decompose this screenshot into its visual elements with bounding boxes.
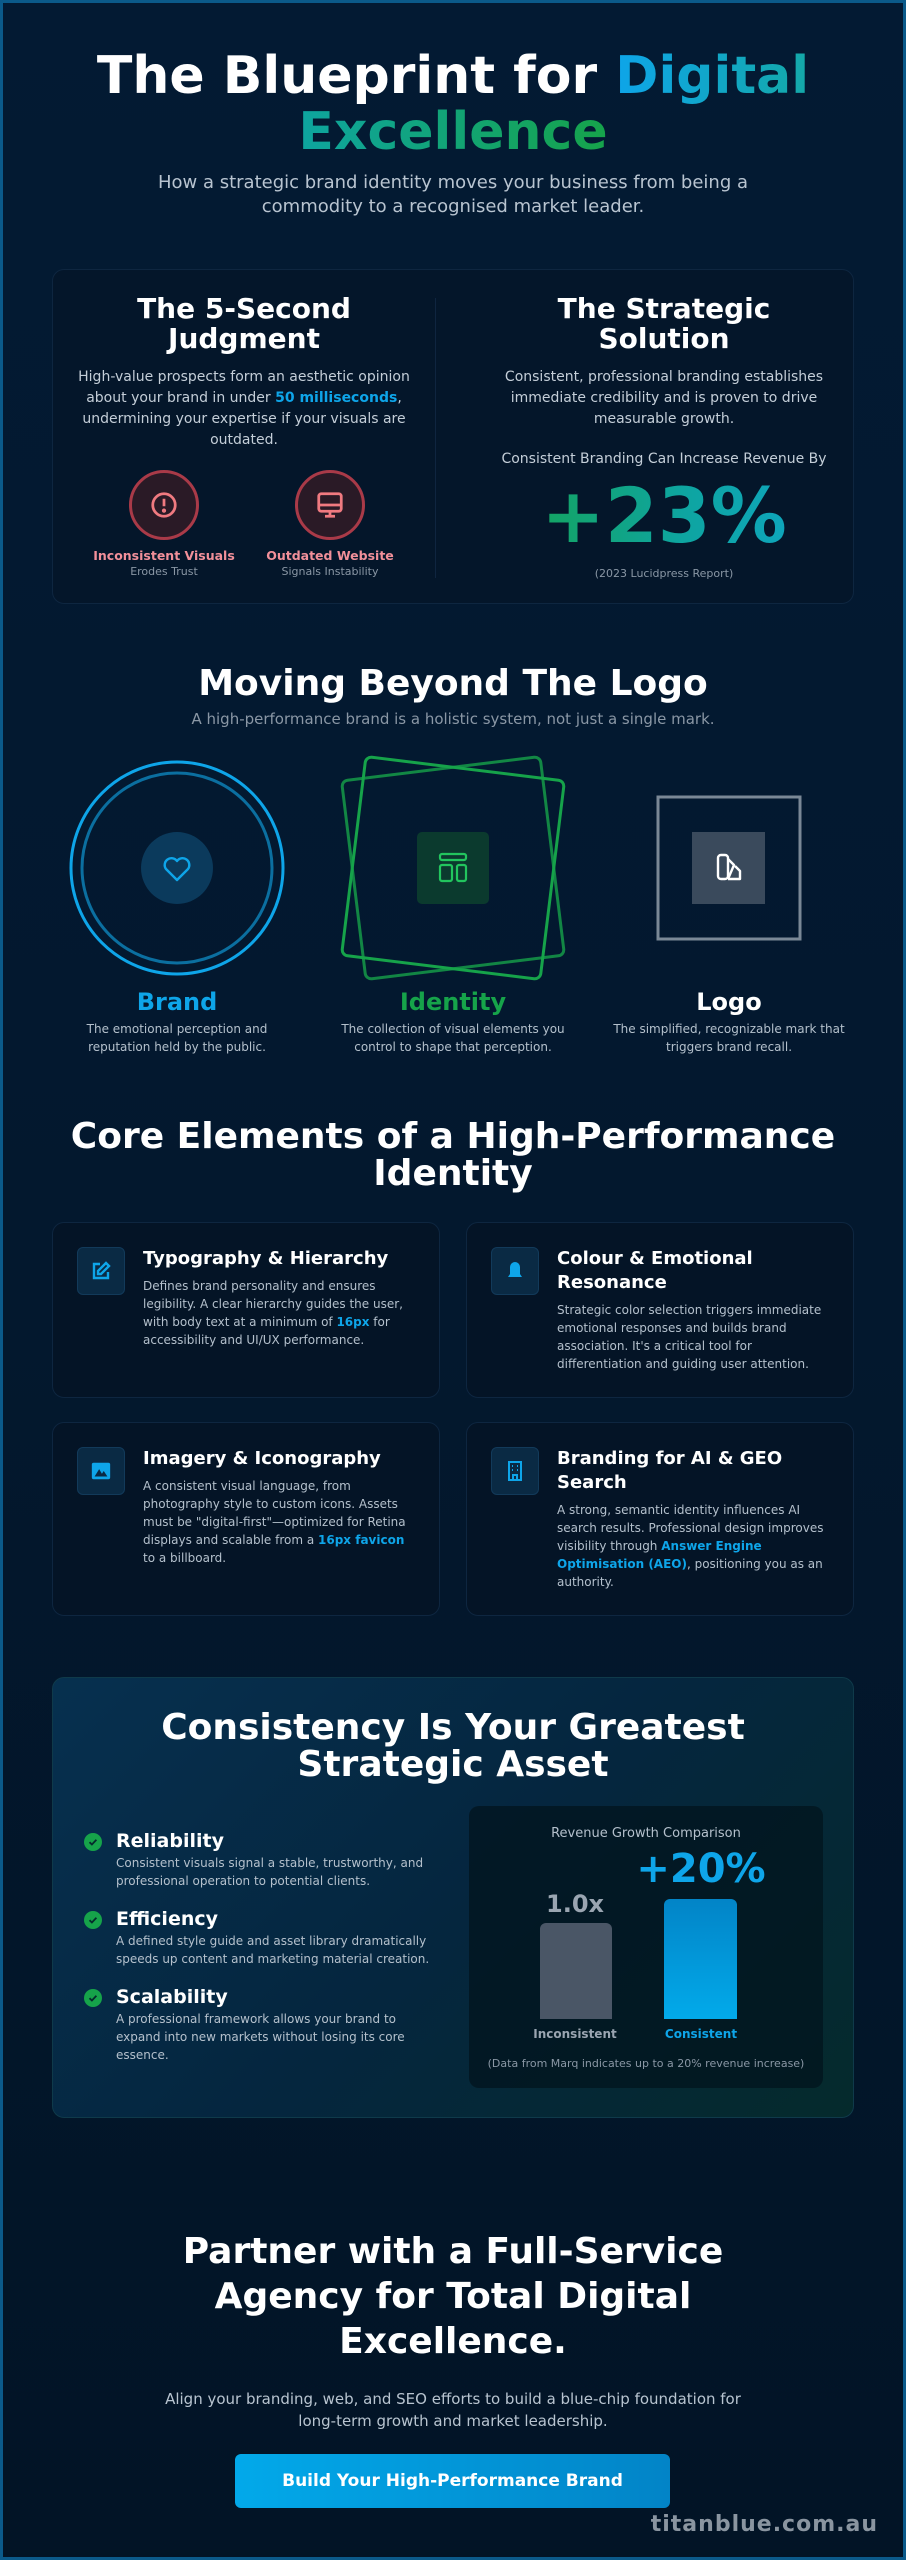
card: colour: Colour & Emotional <box>557 1248 753 1269</box>
heading: strategic solution: The Strategic <box>558 292 770 325</box>
item: scalability: Scalability <box>116 1986 228 2008</box>
icon: pencil <box>77 1247 125 1295</box>
list: benefits <box>84 1830 429 2062</box>
panel: judgment and solution <box>52 269 854 604</box>
heading: 5-second judgment <box>137 292 351 355</box>
footer: website: titanblue.com.au <box>651 2512 878 2537</box>
heading: partner CTA: Agency for Total Digital <box>215 2276 691 2317</box>
label: identity: control to shape that perception. <box>354 1040 552 1054</box>
heading: core elements <box>71 1116 835 1194</box>
heading: partner CTA <box>183 2231 723 2362</box>
item: reliability: Consistent visuals signal a stable, trustworthy, and professional operation to potential clients. <box>116 1856 423 1888</box>
label: brand <box>86 988 267 1054</box>
icon: outdated website <box>295 470 365 540</box>
item: reliability: Reliability <box>116 1830 224 1852</box>
text: CTA body: Align your branding, web, and SEO efforts to build a blue-chip foundation for <box>165 2390 741 2408</box>
card: typography <box>52 1222 440 1398</box>
heading: core elements: Core Elements of a High-Performance <box>71 1116 835 1157</box>
panel: consistency <box>52 1677 854 2118</box>
heading: partner CTA: Partner with a Full-Service <box>183 2231 723 2272</box>
heading: strategic solution <box>558 292 770 355</box>
icon: building <box>491 1447 539 1495</box>
stat: +23% <box>484 470 844 562</box>
icon: bell <box>491 1247 539 1295</box>
heading: consistency: Strategic Asset <box>297 1744 609 1785</box>
text: solution body: Consistent, professional branding establishes immediate credibility and is proven to drive measurable growth. <box>505 369 823 427</box>
chart: revenue growth comparison: Revenue Growth Comparison <box>551 1826 741 1841</box>
title <box>97 46 809 162</box>
label: brand: reputation held by the public. <box>88 1040 266 1054</box>
diagram: brand circles <box>70 760 284 976</box>
subtitle: holistic system: A high-performance brand is a holistic system, not just a single mark. <box>191 710 715 728</box>
button: CTA <box>235 2454 670 2508</box>
card: colour <box>466 1222 854 1398</box>
label: logo <box>613 988 845 1054</box>
heading: consistency <box>161 1707 745 1785</box>
card: typography: Defines brand personality and ensures legibility. A clear hierarchy guides the user, with body text at a minimum of 16px for accessibility and UI/UX performance. <box>143 1279 403 1347</box>
diagram: logo square <box>656 796 802 940</box>
label: inconsistent visuals: Inconsistent Visuals <box>93 548 235 563</box>
item: efficiency: Efficiency <box>116 1908 218 1930</box>
text: revenue label: Consistent Branding Can Increase Revenue By <box>501 451 827 467</box>
chart: revenue growth comparison: (Data from Marq indicates up to a 20% revenue increase) <box>488 2057 804 2070</box>
button: CTA: Build Your High-Performance Brand <box>282 2471 623 2491</box>
heading: strategic solution: Solution <box>598 322 730 355</box>
card: imagery: Imagery & Iconography <box>143 1448 381 1469</box>
text: CTA body <box>165 2390 741 2430</box>
title: Excellence <box>298 102 608 162</box>
card: colour: Strategic color selection triggers immediate emotional responses and builds brand association. It's a critical tool for differentiation and guiding user attention. <box>557 1303 821 1371</box>
item: reliability <box>84 1830 423 1888</box>
label: outdated website: Signals Instability <box>282 565 378 578</box>
heading: 5-second judgment: The 5-Second <box>137 292 351 325</box>
item: efficiency <box>84 1908 429 1966</box>
bar: consistent: +20% <box>636 1846 766 1892</box>
card: AI and GEO: Search <box>557 1472 627 1493</box>
text: judgment body: High-value prospects form an aesthetic opinion about your brand in under 50 milliseconds, undermining your expertise if your visuals are outdated. <box>78 369 410 448</box>
bar: consistent: Consistent <box>665 2027 737 2041</box>
heading: core elements: Identity <box>373 1153 533 1194</box>
card: AI and GEO: A strong, semantic identity influences AI search results. Professional design improves visibility through Answer Engine Optimisation (AEO), positioning you as an authority. <box>557 1503 823 1589</box>
card: AI and GEO <box>466 1422 854 1616</box>
label: brand: Brand <box>137 988 217 1016</box>
subtitle: How a strategic brand identity moves your business from being a <box>158 172 748 193</box>
label: logo: The simplified, recognizable mark that <box>613 1022 845 1036</box>
heading: consistency: Consistency Is Your Greatest <box>161 1707 745 1748</box>
diagram: identity squares <box>340 756 566 980</box>
bar: inconsistent: Inconsistent <box>533 2027 617 2041</box>
card: colour: Resonance <box>557 1272 667 1293</box>
label: identity: The collection of visual elements you <box>341 1022 565 1036</box>
label: logo: triggers brand recall. <box>666 1040 792 1054</box>
subtitle <box>158 172 748 217</box>
heading: partner CTA: Excellence. <box>339 2321 567 2362</box>
bar: inconsistent <box>533 1890 617 2041</box>
icon: image <box>77 1447 125 1495</box>
icon: inconsistent visuals <box>129 470 199 540</box>
label: inconsistent visuals <box>93 548 235 578</box>
label: outdated website: Outdated Website <box>266 548 394 563</box>
item: efficiency: A defined style guide and asset library dramatically speeds up content and marketing material creation. <box>116 1934 429 1966</box>
card: imagery: A consistent visual language, from photography style to custom icons. Assets must be "digital-first"—optimized for Retina displays and scalable from a 16px favicon to a billboard. <box>143 1479 406 1565</box>
chart: revenue growth comparison <box>469 1806 823 2088</box>
label: identity: Identity <box>400 988 506 1016</box>
card: typography: Typography & Hierarchy <box>143 1248 388 1269</box>
item: scalability: A professional framework allows your brand to expand into new markets without losing its core essence. <box>116 2012 405 2062</box>
item: scalability <box>84 1986 405 2062</box>
bar: consistent <box>636 1846 766 2041</box>
text: CTA body: long-term growth and market leadership. <box>298 2412 608 2430</box>
stat: +23%: +23% <box>541 471 787 560</box>
label: outdated website <box>266 548 394 578</box>
heading: moving beyond the logo: Moving Beyond The Logo <box>198 663 708 704</box>
label: identity <box>341 988 565 1054</box>
subtitle: commodity to a recognised market leader. <box>262 196 644 217</box>
card: AI and GEO: Branding for AI & GEO <box>557 1448 782 1469</box>
card: imagery <box>52 1422 440 1616</box>
source note: (2023 Lucidpress Report) <box>595 567 733 580</box>
label: brand: The emotional perception and <box>87 1022 267 1036</box>
bar: inconsistent: 1.0x <box>546 1890 604 1918</box>
label: logo: Logo <box>696 988 762 1016</box>
title: The Blueprint for Digital <box>97 46 809 106</box>
label: inconsistent visuals: Erodes Trust <box>130 565 198 578</box>
heading: 5-second judgment: Judgment <box>168 322 320 355</box>
